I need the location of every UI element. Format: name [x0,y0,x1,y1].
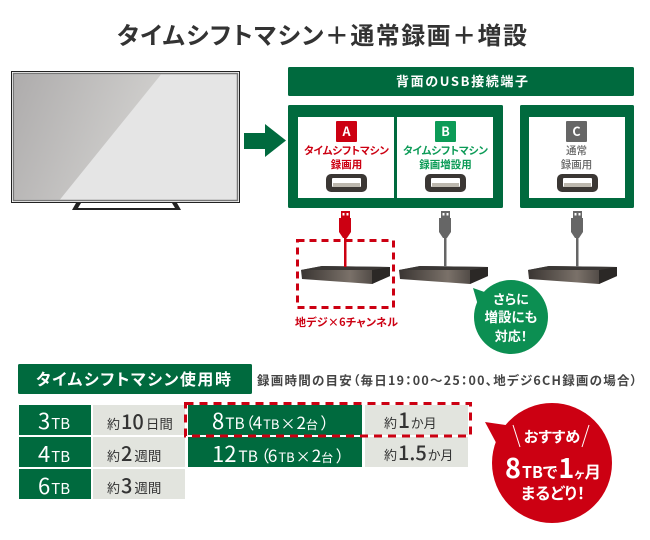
port A: A [341,121,351,140]
icon: hard drive B with grey USB cable [399,211,488,284]
callout: recommended [485,403,612,523]
row: 8TB: 約1か月 [384,405,437,435]
row: 6TB [19,469,185,501]
port A: 録画用 [331,157,362,172]
panel: port C: 録画用 [561,157,592,172]
caption: recording time guide: 録画時間の目安（毎日19：00〜25：00、地デジ6CH録画の場合） [257,370,637,389]
callout: recommended: 8TBで1ヶ月 [505,447,601,486]
callout: expandable: 増設にも [484,306,538,326]
port B: 録画増設用 [419,157,472,172]
heading: rear USB ports: 背面のUSB接続端子 [396,71,528,90]
dashed highlight: drive on port A [298,240,394,308]
port B: B [441,121,450,140]
label: six terrestrial digital channels: 地デジ×6チャンネル [295,314,398,330]
port B [397,117,493,198]
panel: port C: 通常 [566,143,587,158]
panel: port C [520,105,634,208]
callout: expandable: さらに [493,289,529,308]
callout: expandable [473,280,548,354]
heading: when using time shift machine [18,364,252,394]
row: 12TB: 12TB（6TB×2台） [212,437,344,469]
row: 6TB: 約3週間 [107,470,161,499]
dashed highlight: 8TB row [186,404,470,436]
row: 8TB [188,404,468,436]
port A [298,117,394,198]
row: 4TB [19,437,185,469]
icon: television [12,72,240,210]
row: 3TB: 約10日間 [107,406,173,435]
row: 3TB: 3TB [38,404,70,436]
panel: port C: C [572,121,581,140]
icon: hard drive C with grey USB cable [528,211,617,284]
row: 6TB: 6TB [38,469,70,501]
callout: expandable: 対応！ [495,326,527,345]
row: 12TB: 約1.5か月 [384,437,453,466]
port B: タイムシフトマシン [403,143,488,158]
row: 4TB: 4TB [38,437,70,469]
callout: recommended: おすすめ [524,426,580,447]
callout: recommended: まるどり！ [521,480,585,504]
row: 3TB [19,404,185,436]
table: recording times [19,404,468,501]
panel: ports A and B [288,105,503,208]
port A: タイムシフトマシン [304,143,389,158]
arrow: television to USB ports [244,124,286,157]
heading: rear USB ports [288,67,634,96]
heading: when using time shift machine: タイムシフトマシン使用時 [36,366,231,390]
row: 4TB: 約2週間 [107,438,161,467]
title: タイムシフトマシン＋通常録画＋増設 [117,16,527,51]
icon: hard drive A with red USB cable [301,211,390,284]
row: 12TB [188,437,468,469]
row: 8TB: 8TB（4TB×2台） [212,404,329,436]
